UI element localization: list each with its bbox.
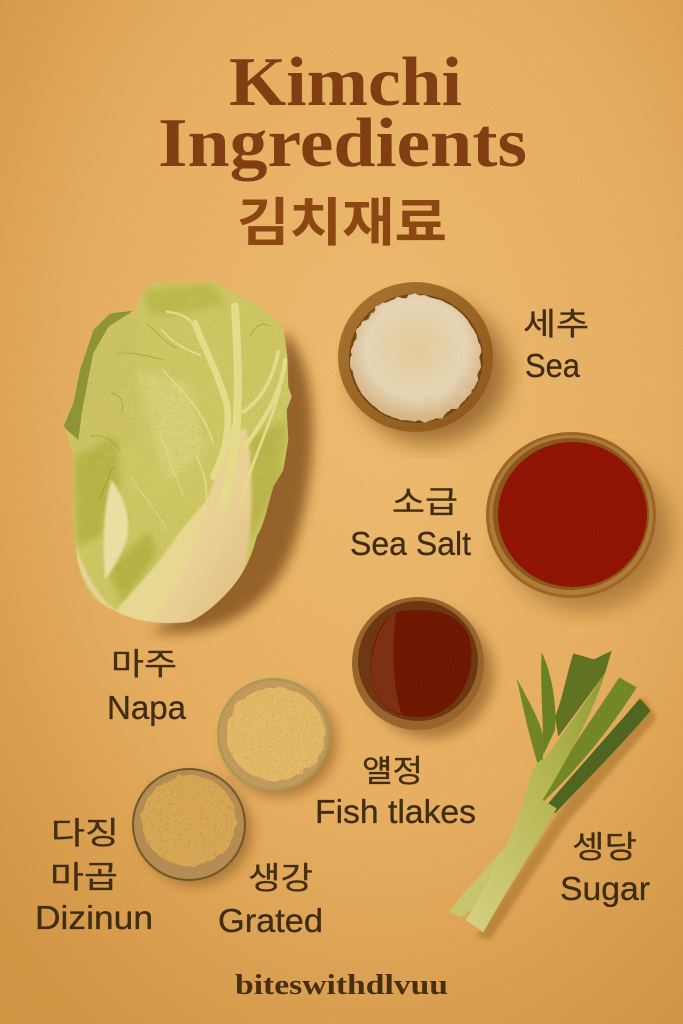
korean subtitle: 김치재료 xyxy=(237,195,447,253)
label: fish flakes: 얠정 xyxy=(362,754,423,789)
icon: green onion xyxy=(449,651,657,940)
label: sea salt: 소급 xyxy=(392,485,458,520)
title: Kimchi xyxy=(229,44,462,121)
label: sea salt: Sea Salt xyxy=(350,525,471,562)
label: sea (korean and english): 세추 xyxy=(523,307,589,342)
label: grated: Grated xyxy=(218,902,323,939)
bowl: garlic powder xyxy=(132,768,252,886)
label: napa xyxy=(107,647,187,726)
label: grated xyxy=(218,861,323,939)
bowl: dark fish sauce xyxy=(352,597,494,738)
icon: napa cabbage xyxy=(60,277,313,633)
footer credit: biteswithdlvuu xyxy=(235,969,448,1001)
bowl: ginger powder xyxy=(217,678,337,797)
label: sugar: 셍당 xyxy=(572,830,637,865)
label: fish flakes: Fish tlakes xyxy=(315,793,476,830)
label: dizinun: 마곱 xyxy=(50,860,118,895)
label: dizinun: 다징 xyxy=(51,816,119,851)
bowl: red chili liquid xyxy=(486,432,671,610)
label: grated: 생강 xyxy=(248,861,313,896)
label: sugar xyxy=(560,830,650,907)
label: sea (korean and english) xyxy=(523,307,589,384)
label: sugar: Sugar xyxy=(560,870,650,907)
label: fish flakes xyxy=(315,754,476,830)
label: napa: 마주 xyxy=(111,647,177,682)
label: sea salt xyxy=(350,485,471,562)
label: dizinun xyxy=(35,816,153,936)
label: sea (korean and english): Sea xyxy=(525,347,581,384)
bowl: coarse salt xyxy=(338,282,508,444)
label: dizinun: Dizinun xyxy=(35,899,153,936)
title: Ingredients xyxy=(158,105,527,182)
title xyxy=(158,44,527,182)
label: napa: Napa xyxy=(107,689,187,726)
